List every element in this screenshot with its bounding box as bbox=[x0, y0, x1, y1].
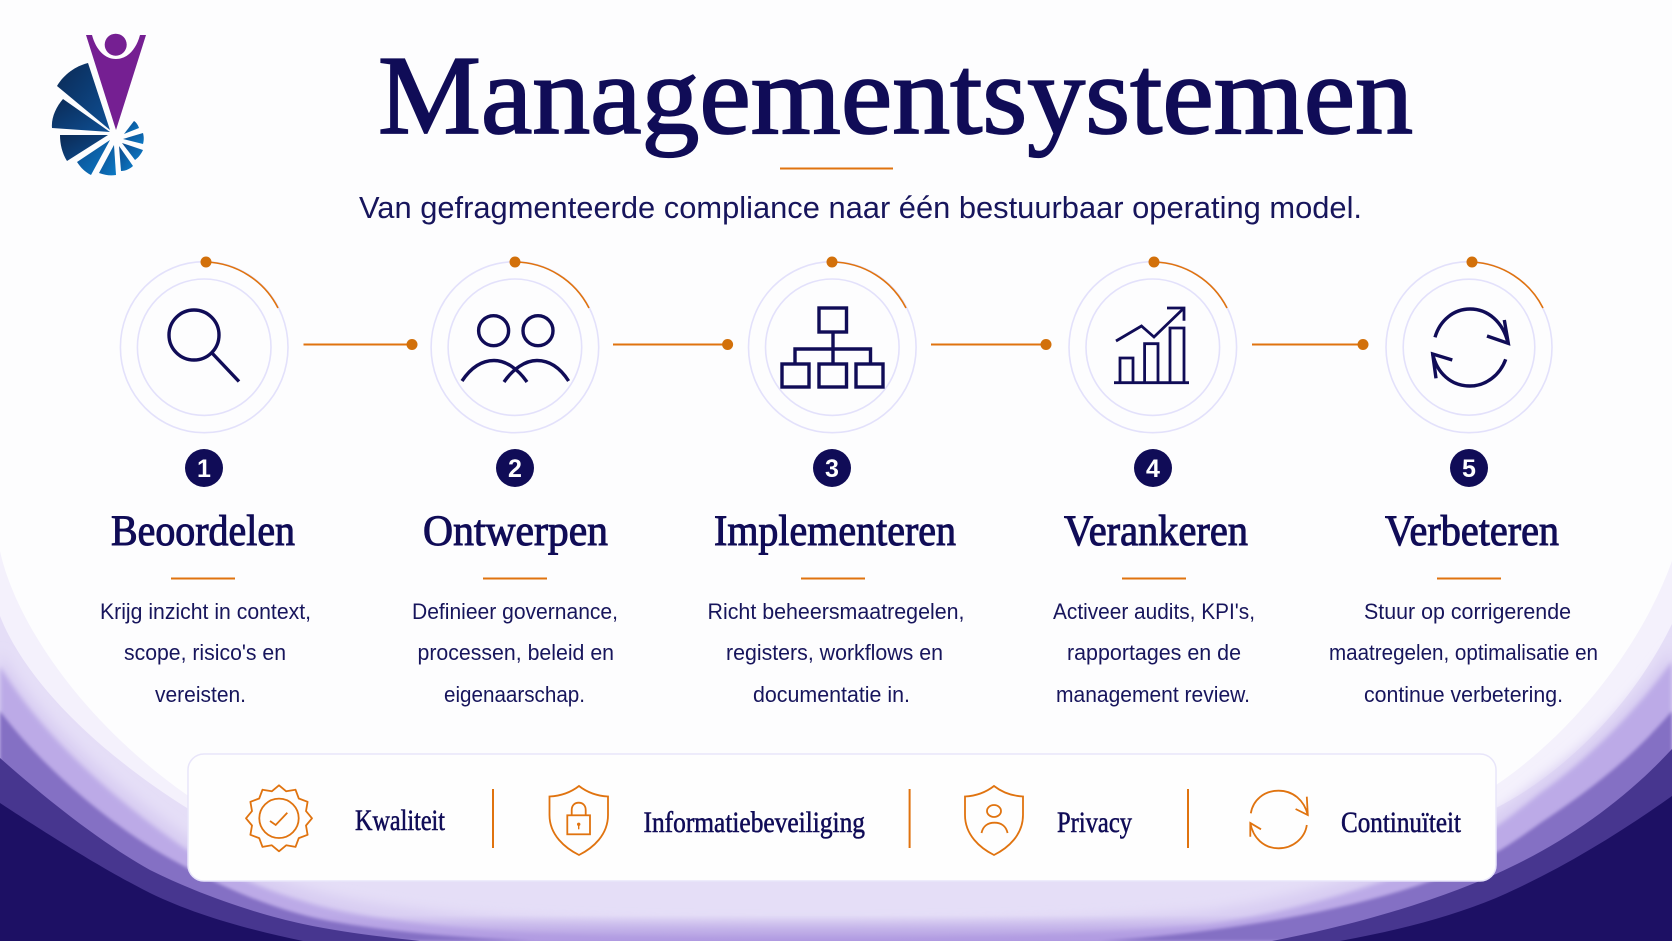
icon: org chart bbox=[782, 308, 883, 387]
number badge 1: 1 bbox=[197, 455, 211, 483]
number badge 4: 4 bbox=[1146, 455, 1160, 483]
description 5 bbox=[1329, 599, 1598, 707]
step 2: Ontwerpen bbox=[412, 256, 618, 707]
number badge 3 bbox=[813, 449, 851, 487]
connector 1 bbox=[304, 339, 418, 350]
description 3 bbox=[708, 599, 964, 707]
logo bbox=[52, 34, 146, 175]
connector 2 bbox=[613, 339, 733, 350]
icon: people bbox=[462, 316, 569, 382]
number badge 1 bbox=[185, 449, 223, 487]
step 5: Verbeteren bbox=[1329, 256, 1598, 707]
heading 5: Verbeteren bbox=[1385, 508, 1559, 555]
number badge 5: 5 bbox=[1462, 455, 1476, 483]
icon: privacy shield bbox=[965, 786, 1023, 855]
description 4: management review. bbox=[1056, 682, 1250, 707]
description 2: processen, beleid en bbox=[418, 640, 614, 665]
progress rings 4 bbox=[1069, 256, 1237, 433]
progress rings 5 bbox=[1386, 256, 1552, 433]
icon: continuity cycle bbox=[1250, 791, 1308, 848]
description 5: maatregelen, optimalisatie en bbox=[1329, 640, 1598, 665]
number badge 3: 3 bbox=[825, 455, 839, 483]
description 1: scope, risico's en bbox=[124, 640, 286, 665]
label: Privacy: Privacy bbox=[1057, 806, 1132, 839]
icon: quality seal bbox=[246, 785, 312, 851]
panel: pillars bar bbox=[188, 754, 1496, 881]
step 3: Implementeren bbox=[708, 256, 964, 707]
description 4: Activeer audits, KPI's, bbox=[1053, 599, 1255, 624]
progress rings 1 bbox=[120, 256, 288, 433]
number badge 2 bbox=[496, 449, 534, 487]
label: Informatiebeveiliging: Informatiebeveiliging bbox=[644, 806, 865, 839]
icon: security shield bbox=[550, 786, 608, 855]
step 4: Verankeren bbox=[1053, 256, 1255, 707]
icon: growth chart bbox=[1114, 308, 1189, 383]
icon: magnifier bbox=[169, 310, 239, 382]
title: Managementsystemen bbox=[378, 34, 1413, 158]
number badge 4 bbox=[1134, 449, 1172, 487]
description 4: rapportages en de bbox=[1067, 640, 1241, 665]
description 2: eigenaarschap. bbox=[444, 682, 585, 707]
heading 1: Beoordelen bbox=[111, 508, 295, 555]
heading 4: Verankeren bbox=[1064, 508, 1248, 555]
number badge 5 bbox=[1450, 449, 1488, 487]
step 1: Beoordelen bbox=[100, 256, 311, 707]
description 2: Definieer governance, bbox=[412, 599, 618, 624]
label: Continuïteit: Continuïteit bbox=[1341, 806, 1462, 839]
description 5: continue verbetering. bbox=[1364, 682, 1563, 707]
description 4 bbox=[1053, 599, 1255, 707]
number badge 2: 2 bbox=[508, 455, 522, 483]
connector 3 bbox=[931, 339, 1052, 350]
heading 3: Implementeren bbox=[714, 508, 956, 555]
title underline bbox=[780, 168, 893, 170]
description 5: Stuur op corrigerende bbox=[1364, 599, 1571, 624]
label: Kwaliteit: Kwaliteit bbox=[355, 804, 446, 837]
icon: cycle bbox=[1433, 309, 1508, 386]
description 3: Richt beheersmaatregelen, bbox=[708, 599, 964, 624]
description 1 bbox=[100, 599, 311, 707]
heading 2: Ontwerpen bbox=[423, 508, 608, 555]
description 3: registers, workflows en bbox=[726, 640, 943, 665]
subtitle: Van gefragmenteerde compliance naar één bestuurbaar operating model. bbox=[359, 190, 1362, 225]
description 1: Krijg inzicht in context, bbox=[100, 599, 311, 624]
description 1: vereisten. bbox=[155, 682, 246, 707]
connector 4 bbox=[1252, 339, 1368, 350]
description 3: documentatie in. bbox=[753, 682, 910, 707]
progress rings 2 bbox=[431, 256, 599, 433]
progress rings 3 bbox=[748, 256, 916, 433]
description 2 bbox=[412, 599, 618, 707]
